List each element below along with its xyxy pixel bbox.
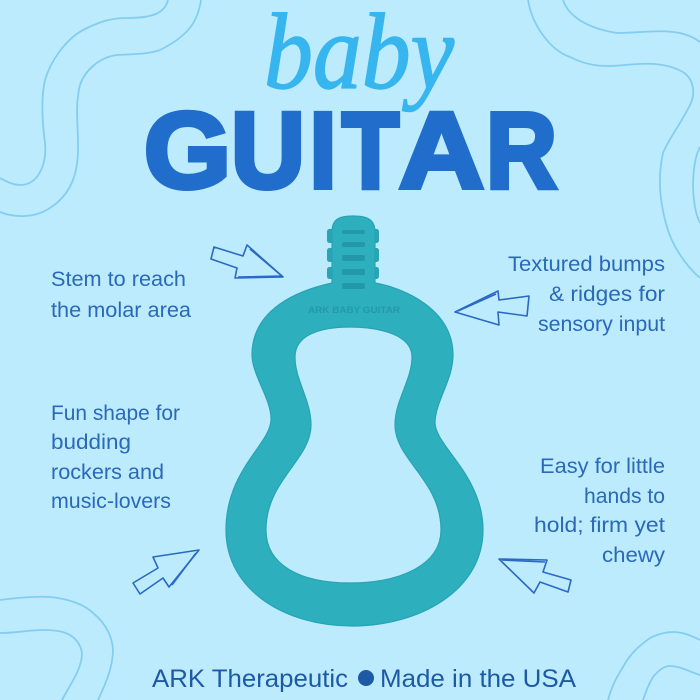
title: GUITAR: G — [144, 90, 231, 210]
embossed product name: ARK BABY GUITAR — [308, 305, 401, 315]
text: fun shape: Fun shape for — [51, 402, 180, 425]
title: GUITAR: T — [342, 90, 399, 210]
text: textured bumps: & ridges for — [549, 283, 665, 306]
stem ridges — [342, 230, 365, 289]
title: GUITAR — [144, 90, 557, 210]
text: textured bumps — [508, 253, 665, 336]
text: textured bumps: sensory input — [538, 313, 665, 336]
text: textured bumps: Textured bumps — [508, 253, 665, 276]
teether: baby guitar — [226, 216, 483, 626]
arrow: easy to hold — [499, 559, 571, 593]
text: fun shape: rockers and — [51, 461, 164, 484]
text: fun shape — [51, 402, 180, 513]
stem bumps — [327, 229, 379, 279]
footer: Made in the USA — [380, 665, 576, 693]
arrow: stem — [211, 245, 283, 278]
text: easy to hold: Easy for little — [540, 455, 665, 478]
footer — [152, 665, 576, 693]
text: easy to hold: chewy — [602, 544, 666, 567]
text: stem: Stem to reach — [51, 268, 186, 291]
title: GUITAR: R — [486, 90, 557, 210]
title: GUITAR: A — [399, 90, 484, 210]
text: easy to hold: hold; firm yet — [534, 514, 665, 537]
arrow: textured bumps — [455, 291, 529, 325]
footer: ARK Therapeutic — [152, 665, 348, 693]
text: easy to hold: hands to — [584, 485, 665, 508]
arrow: fun shape — [133, 550, 199, 594]
text: stem — [51, 268, 191, 322]
text: stem: the molar area — [51, 299, 191, 322]
footer dot — [358, 670, 374, 686]
title: GUITAR: I — [310, 90, 336, 210]
text: fun shape: budding — [51, 431, 131, 454]
text: fun shape: music-lovers — [51, 490, 171, 513]
guitar body — [226, 216, 483, 626]
title: GUITAR: U — [231, 90, 305, 210]
text: easy to hold — [534, 455, 666, 567]
